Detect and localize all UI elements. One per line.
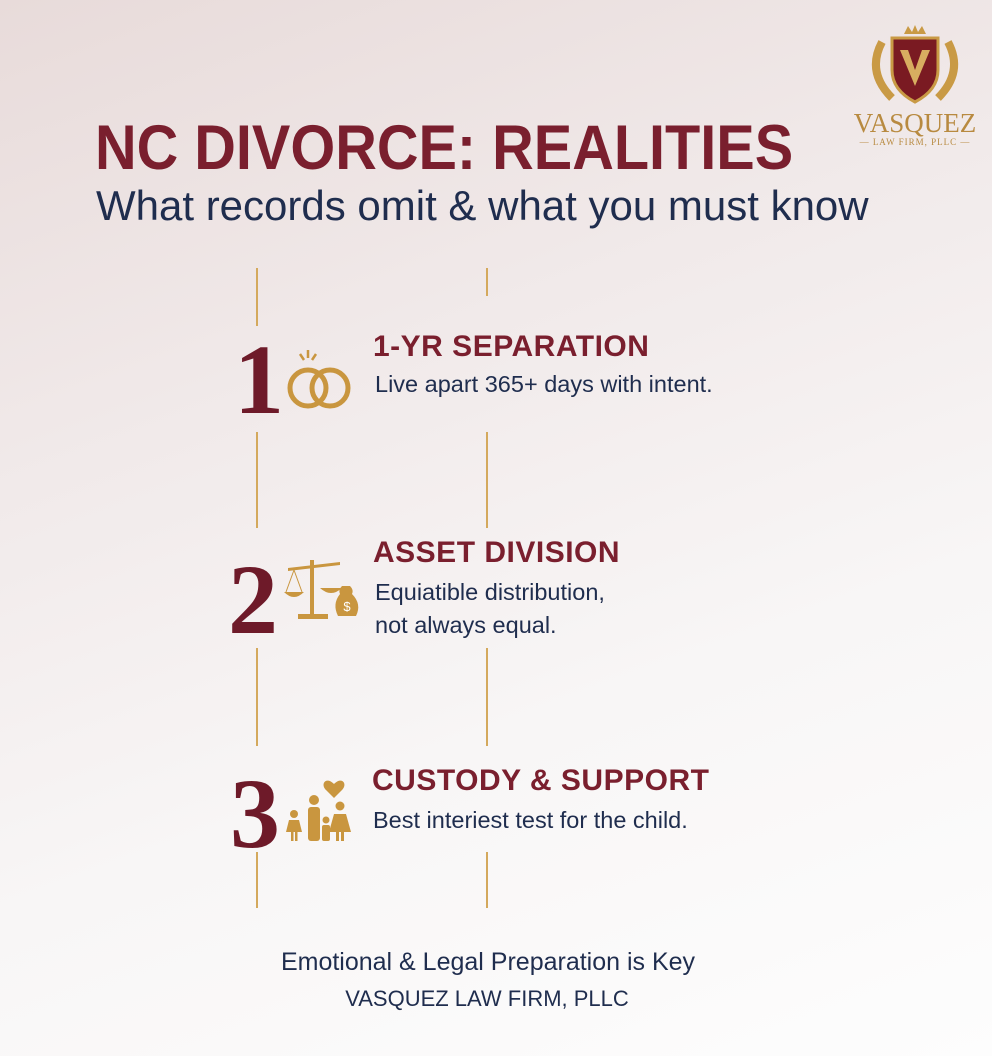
icon: scales and money bag: $ (343, 599, 351, 614)
icon: scales and money bag (284, 560, 358, 619)
heading: CUSTODY & SUPPORT (372, 764, 709, 797)
heading: ASSET DIVISION (373, 536, 620, 569)
icon: family with heart (286, 780, 351, 841)
title: NC DIVORCE: REALITIES (95, 113, 793, 183)
number 3: 3 (230, 758, 280, 869)
icon: rings (288, 350, 350, 408)
icon: laurel and shield (876, 38, 954, 102)
footer tagline: Emotional & Legal Preparation is Key (281, 948, 695, 976)
number 1: 1 (234, 324, 284, 435)
body: not always equal. (375, 612, 557, 638)
step 2 (228, 536, 620, 655)
logo: — LAW FIRM, PLLC — (860, 137, 970, 147)
body: Live apart 365+ days with intent. (375, 371, 713, 397)
subtitle: What records omit & what you must know (96, 182, 869, 229)
step 3 (230, 758, 709, 869)
logo: VASQUEZ (854, 108, 976, 138)
body: Best interiest test for the child. (373, 807, 688, 833)
body (375, 579, 605, 638)
heading: 1-YR SEPARATION (373, 330, 649, 363)
body: Equiatible distribution, (375, 579, 605, 605)
number 2: 2 (228, 544, 278, 655)
step 1 (234, 324, 713, 435)
icon: crown (904, 25, 926, 34)
logo (854, 25, 976, 147)
footer firm name: VASQUEZ LAW FIRM, PLLC (345, 986, 629, 1011)
